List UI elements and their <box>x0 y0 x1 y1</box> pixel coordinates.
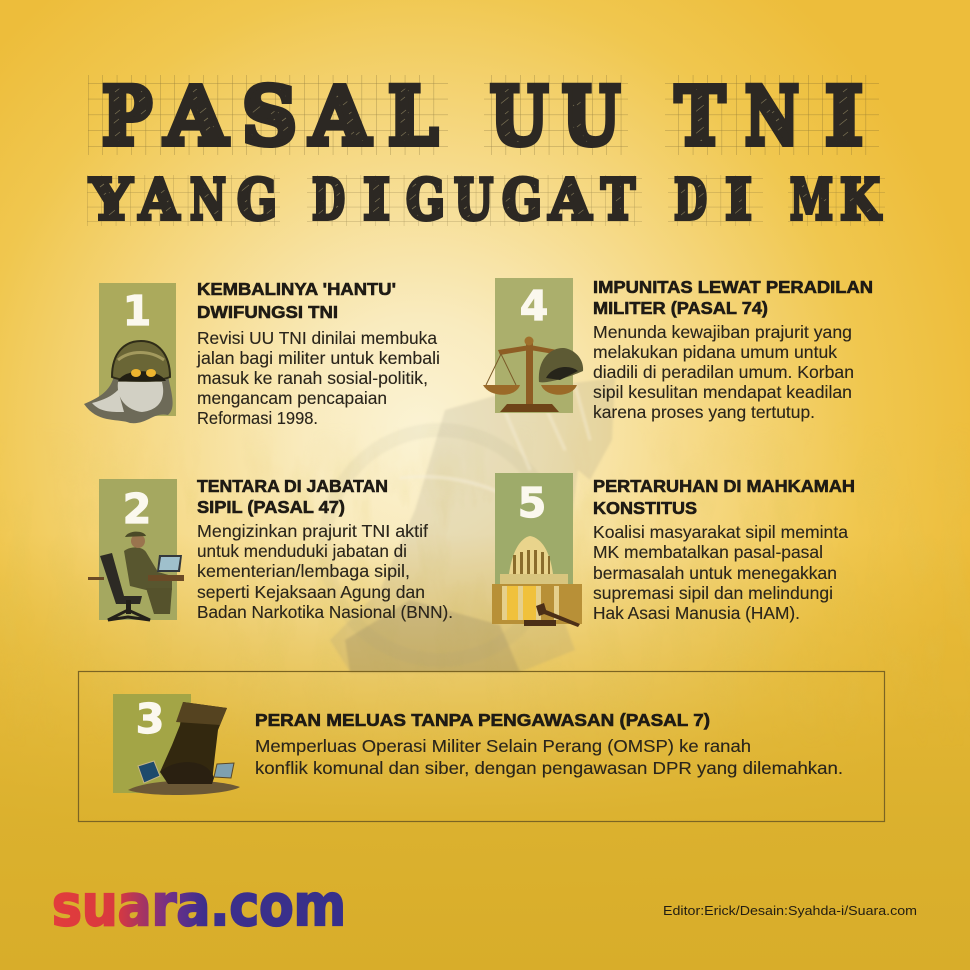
body 2: kementerian/lembaga sipil, <box>197 561 410 581</box>
title line 1: T <box>675 69 725 163</box>
number 5: 5 <box>518 479 546 527</box>
title line 1: S <box>242 69 297 163</box>
title line 2: I <box>725 167 752 233</box>
body 3: konflik komunal dan siber, dengan pengawasan DPR yang dilemahkan. <box>255 758 843 778</box>
body 1: Reformasi 1998. <box>197 408 318 428</box>
panel: item 2 <box>88 476 453 622</box>
watermark: faded boot and globe illustration <box>325 378 615 672</box>
title line 1: A <box>309 69 371 163</box>
title line 2: U <box>454 167 493 233</box>
number panel 4 <box>495 278 573 413</box>
heading 1: KEMBALINYA 'HANTU' <box>197 279 396 299</box>
title line 2: A <box>548 167 592 233</box>
body 1: Revisi UU TNI dinilai membuka <box>197 328 437 348</box>
title line 2: D <box>312 167 345 233</box>
title line 1 <box>102 69 863 163</box>
title line 2: D <box>674 167 707 233</box>
heading 2: TENTARA DI JABATAN <box>197 476 388 496</box>
title line 2: M <box>790 167 833 233</box>
body 5: Koalisi masyarakat sipil meminta <box>593 522 848 542</box>
title line 2: N <box>190 167 226 233</box>
title line 2 <box>89 167 882 233</box>
title line 1: U <box>562 69 620 163</box>
heading 5: KONSTITUS <box>593 498 697 518</box>
body 1 <box>196 328 440 428</box>
panel: item 4 <box>483 277 873 422</box>
body 4: sipil kesulitan mendapat keadilan <box>593 382 852 402</box>
body 4: diadili di peradilan umum. Korban <box>593 362 854 382</box>
title line 2: G <box>237 167 277 233</box>
number 4: 4 <box>520 282 548 330</box>
number panel 3 <box>113 694 191 793</box>
icon: soldier at desk <box>88 532 184 620</box>
heading 2 <box>197 476 388 517</box>
body 5: MK membatalkan pasal-pasal <box>593 542 823 562</box>
panel: item 3 <box>78 672 884 822</box>
number panel 5 <box>495 473 573 621</box>
body 3: Memperluas Operasi Militer Selain Perang (OMSP) ke ranah <box>255 736 751 756</box>
number 2: 2 <box>123 485 151 533</box>
title line 1: L <box>388 69 438 163</box>
body 4: melakukan pidana umum untuk <box>593 342 837 362</box>
body 5: bermasalah untuk menegakkan <box>593 563 837 583</box>
body 2: Mengizinkan prajurit TNI aktif <box>197 521 428 541</box>
title line 2: Y <box>89 167 133 233</box>
logo: suara.com: suara.com <box>52 873 346 939</box>
heading 4 <box>593 277 873 318</box>
body 2: Badan Narkotika Nasional (BNN). <box>197 602 453 622</box>
title line 2: G <box>502 167 542 233</box>
credit: Editor:Erick/Desain:Syahda-i/Suara.com <box>663 903 917 918</box>
body 4: karena proses yang tertutup. <box>593 402 815 422</box>
title line 2: K <box>840 167 882 233</box>
heading 4: MILITER (PASAL 74) <box>593 298 768 318</box>
body 4 <box>593 322 854 422</box>
body 2: untuk menduduki jabatan di <box>197 541 407 561</box>
number panel 1 <box>99 283 176 416</box>
body 1: masuk ke ranah sosial-politik, <box>197 368 428 388</box>
body 1: jalan bagi militer untuk kembali <box>196 348 440 368</box>
body 3 <box>255 736 843 778</box>
body 5: supremasi sipil dan melindungi <box>593 583 833 603</box>
heading 4: IMPUNITAS LEWAT PERADILAN <box>593 277 873 297</box>
title line 2: A <box>138 167 180 233</box>
title grid <box>87 75 885 226</box>
icon: constitutional court and gavel <box>492 536 582 627</box>
heading 2: SIPIL (PASAL 47) <box>197 497 345 517</box>
heading 1: DWIFUNGSI TNI <box>197 302 338 322</box>
title line 1: P <box>102 69 152 163</box>
number panel 2 <box>99 479 177 620</box>
body 5 <box>593 522 848 623</box>
title line 1: I <box>825 69 863 163</box>
title line 1: U <box>490 69 548 163</box>
title line 1: N <box>745 69 799 163</box>
title line 1: A <box>164 69 228 163</box>
body 1: mengancam pencapaian <box>197 388 387 408</box>
heading 3: PERAN MELUAS TANPA PENGAWASAN (PASAL 7) <box>255 710 710 730</box>
panel: item 1 <box>84 279 440 428</box>
title line 2: I <box>363 167 390 233</box>
title line 2: T <box>601 167 635 233</box>
number 1: 1 <box>123 287 151 335</box>
callout frame <box>78 672 884 822</box>
number 3: 3 <box>136 695 164 743</box>
heading 1 <box>197 279 396 322</box>
panel: item 5 <box>492 473 855 627</box>
heading 5 <box>593 476 855 518</box>
icon: boot on rubble <box>128 702 240 795</box>
heading 5: PERTARUHAN DI MAHKAMAH <box>593 476 855 496</box>
icon: ghost helmet <box>84 341 173 423</box>
body 5: Hak Asasi Manusia (HAM). <box>593 603 800 623</box>
body 2 <box>197 521 453 622</box>
title <box>87 69 885 233</box>
icon: scales with helmet <box>483 336 583 412</box>
title line 2: G <box>406 167 445 233</box>
body 2: seperti Kejaksaan Agung dan <box>197 582 425 602</box>
body 4: Menunda kewajiban prajurit yang <box>593 322 852 342</box>
